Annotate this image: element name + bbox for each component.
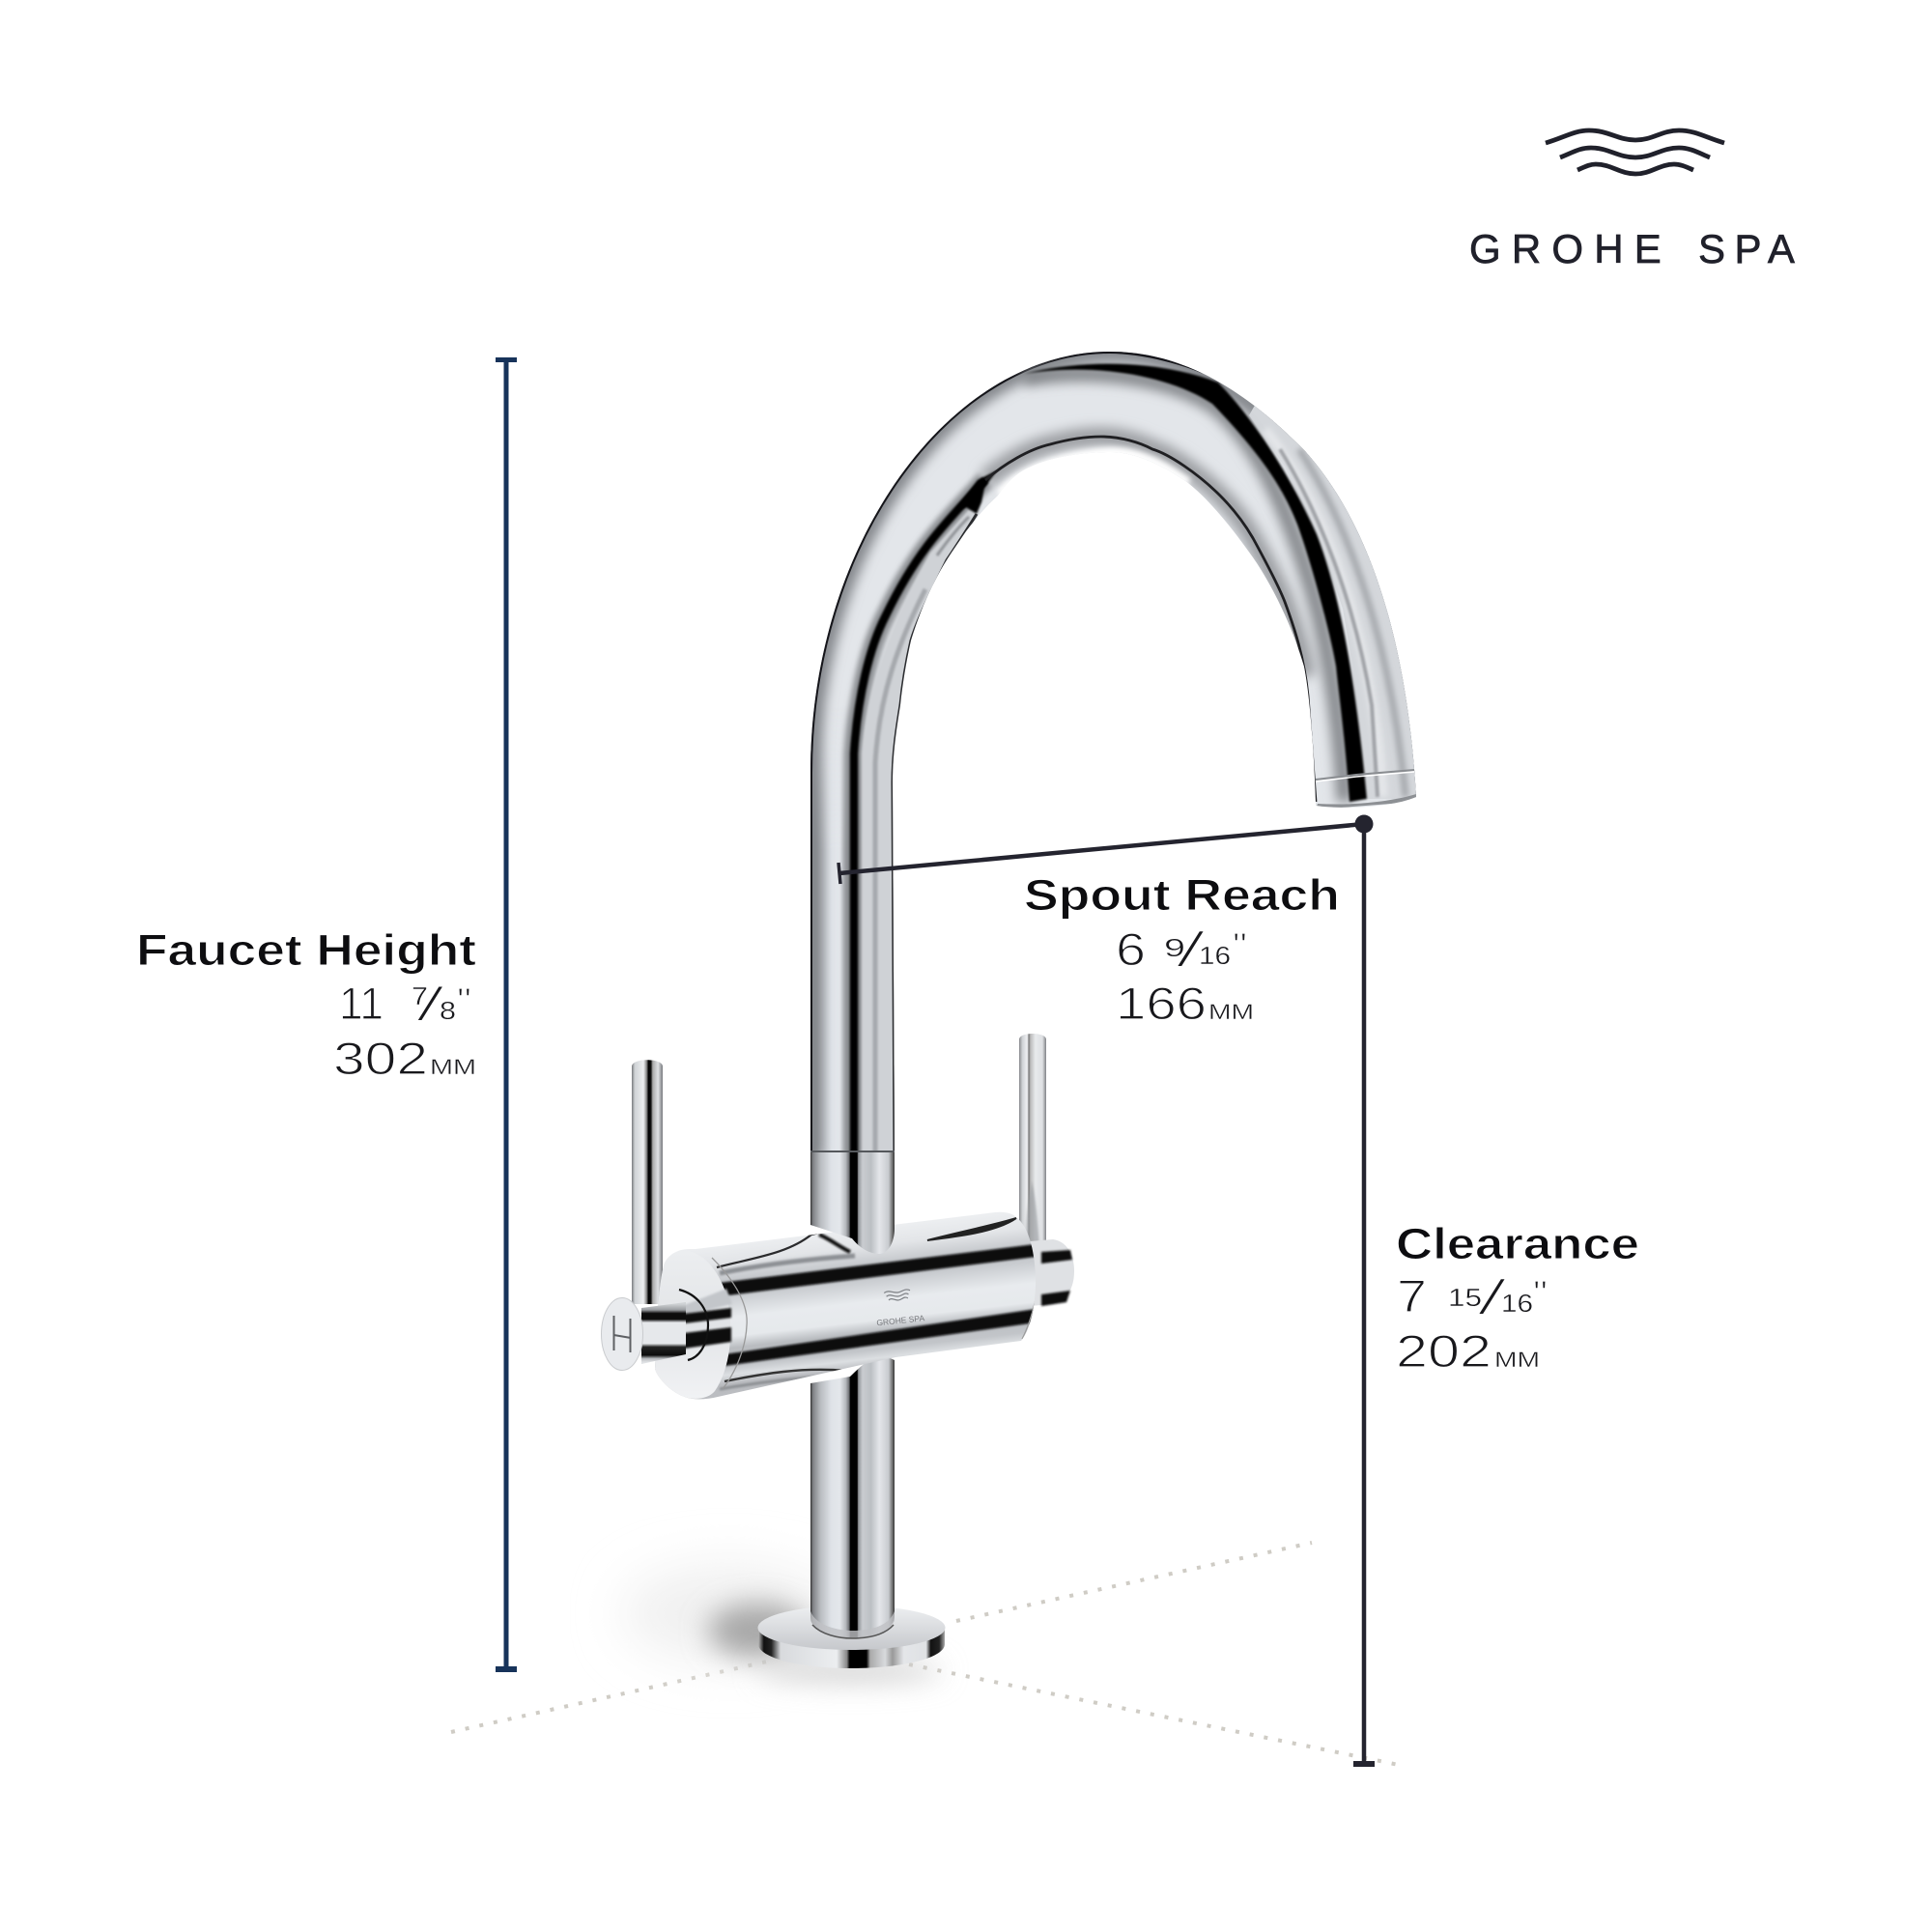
label: faucet height xyxy=(136,925,476,1084)
left handle neck and knob xyxy=(601,1289,732,1370)
icon: H hot marker xyxy=(614,1316,631,1352)
shading beside dark band xyxy=(1024,374,1345,802)
logo: Grohe Spa xyxy=(1469,130,1804,271)
inches value: 8 xyxy=(440,996,456,1025)
dimension: clearance and spout reach lines xyxy=(838,815,1375,1767)
inches value xyxy=(1397,1269,1548,1325)
millimetres value xyxy=(1396,1325,1540,1377)
icon: small waves xyxy=(884,1290,911,1301)
left lever handle xyxy=(632,1060,663,1304)
label: spout reach xyxy=(1024,870,1340,1029)
inner dark line xyxy=(985,437,1316,802)
inches value: ⁄ xyxy=(1479,1269,1505,1325)
millimetres value: 166 xyxy=(1116,978,1207,1029)
spout dark band shadow xyxy=(854,480,985,1154)
inches value: 16 xyxy=(1501,1289,1533,1318)
millimetres value xyxy=(1116,978,1254,1029)
brand name: GROHE xyxy=(1469,226,1672,271)
engraved brand name: GROHE SPA xyxy=(876,1313,925,1327)
faucet collar xyxy=(810,1152,895,1254)
spout right light section xyxy=(1249,386,1420,799)
faucet spout and upper stem xyxy=(802,343,1430,1164)
inches value: " xyxy=(1533,1273,1548,1313)
right end nub xyxy=(1030,1239,1074,1306)
body top dark band xyxy=(720,1243,1043,1296)
right lever handle xyxy=(1019,1034,1046,1252)
floor guide: dotted lines xyxy=(451,1543,1399,1765)
inches value: ⁄ xyxy=(1178,922,1204,978)
brand name: SPA xyxy=(1698,226,1804,271)
inches value xyxy=(1116,922,1247,978)
inches value: 9 xyxy=(1164,933,1185,962)
spout inner stripes xyxy=(862,510,980,1154)
spout dark reflection band xyxy=(1024,364,1367,802)
label: clearance xyxy=(1396,1219,1639,1377)
inches value: 7 xyxy=(1397,1270,1427,1321)
faucet lower stem xyxy=(810,1355,895,1638)
millimetres value: MM xyxy=(1494,1348,1540,1372)
body bottom dark band xyxy=(724,1308,1043,1366)
heading: Faucet Height xyxy=(136,925,476,975)
inches value: " xyxy=(1233,925,1247,965)
inches value: 6 xyxy=(1116,923,1146,975)
inches value: 11 xyxy=(339,978,384,1029)
inches value: 7 xyxy=(412,981,428,1010)
inches value xyxy=(339,977,471,1031)
left stem shading xyxy=(810,750,895,1151)
faucet xyxy=(601,343,1430,1668)
millimetres value: 302 xyxy=(333,1033,428,1084)
faucet body cylinder xyxy=(655,1211,1036,1399)
spout tip ring xyxy=(1316,770,1414,780)
inches value: " xyxy=(457,980,471,1020)
spout collar line xyxy=(810,1151,895,1152)
inner boundary dark line xyxy=(893,514,977,1154)
millimetres value: MM xyxy=(430,1055,476,1079)
fade under inner dark line xyxy=(1000,452,1188,495)
shading along inner dark line xyxy=(985,437,1306,676)
heading: Spout Reach xyxy=(1024,870,1340,920)
inches value: 16 xyxy=(1199,941,1231,970)
spout left dark band xyxy=(854,480,985,1154)
spout dark blob xyxy=(960,469,997,514)
icon: water waves xyxy=(1546,130,1724,174)
millimetres value xyxy=(333,1033,476,1084)
inches value: ⁄ xyxy=(417,977,442,1031)
millimetres value: MM xyxy=(1208,1000,1254,1024)
faucet base plate xyxy=(757,1605,945,1668)
heading: Clearance xyxy=(1396,1219,1639,1268)
dimension: faucet height line xyxy=(496,357,517,1672)
inches value: 15 xyxy=(1448,1283,1482,1312)
body engraved logo xyxy=(873,1288,925,1327)
body left end disc xyxy=(655,1251,730,1399)
millimetres value: 202 xyxy=(1396,1325,1492,1377)
base shadow xyxy=(623,1565,942,1682)
